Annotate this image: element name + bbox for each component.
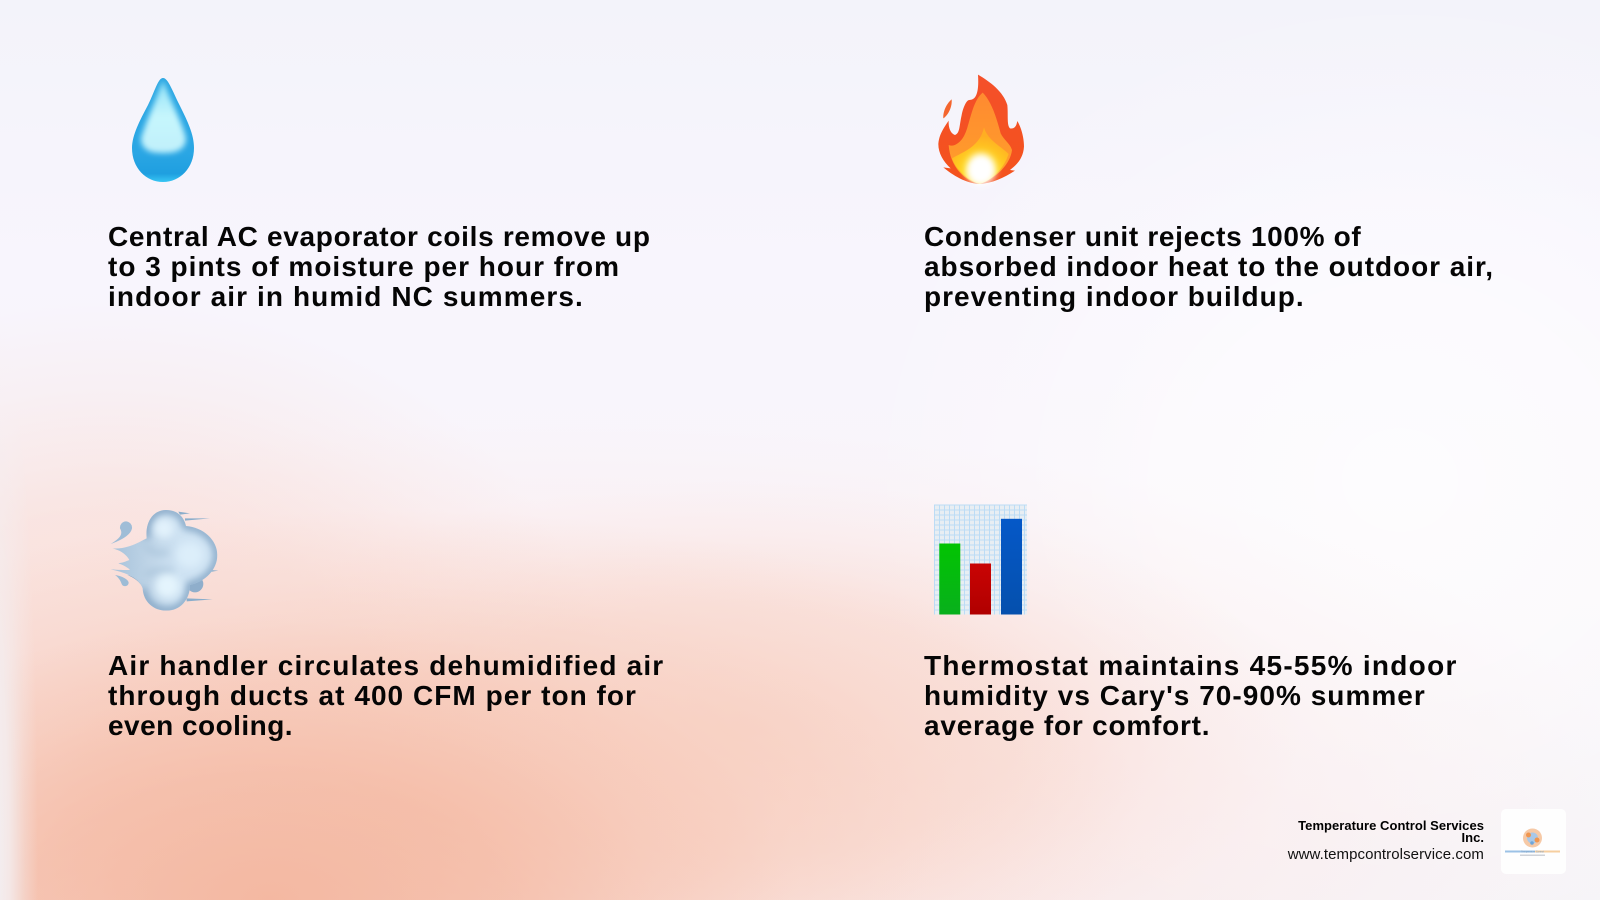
text: thermostat [924,650,1458,741]
text: thermostat: Thermostat maintains 45-55% indoor [924,650,1458,681]
text: thermostat: average for comfort. [924,710,1210,741]
text: condenser unit: preventing indoor buildup. [924,281,1305,312]
text: evaporator coils [108,221,651,312]
text: condenser unit: Condenser unit rejects 100% of [924,221,1361,252]
icon: wind cloud [111,510,218,610]
text: thermostat: humidity vs Cary's 70-90% summer [924,680,1426,711]
footer: company name and website: Temperature Control Services [1298,818,1484,833]
text: evaporator coils: to 3 pints of moisture per hour from [108,251,620,282]
logo card [1501,809,1566,874]
text: evaporator coils: Central AC evaporator coils remove up [108,221,651,252]
text: air handler [108,650,664,741]
text: air handler: even cooling. [108,710,293,741]
text: condenser unit: absorbed indoor heat to the outdoor air, [924,251,1494,282]
text: evaporator coils: indoor air in humid NC summers. [108,281,584,312]
footer: company name and website: Inc. [1461,830,1484,845]
logo card: Temperature Control [1521,850,1544,854]
text: condenser unit [924,221,1494,312]
text: air handler: Air handler circulates dehumidified air [108,650,664,681]
footer: company name and website: www.tempcontrolservice.com [1288,846,1484,863]
text: air handler: through ducts at 400 CFM per ton for [108,680,637,711]
icon: water drop [132,78,194,182]
footer: company name and website [1288,818,1484,863]
